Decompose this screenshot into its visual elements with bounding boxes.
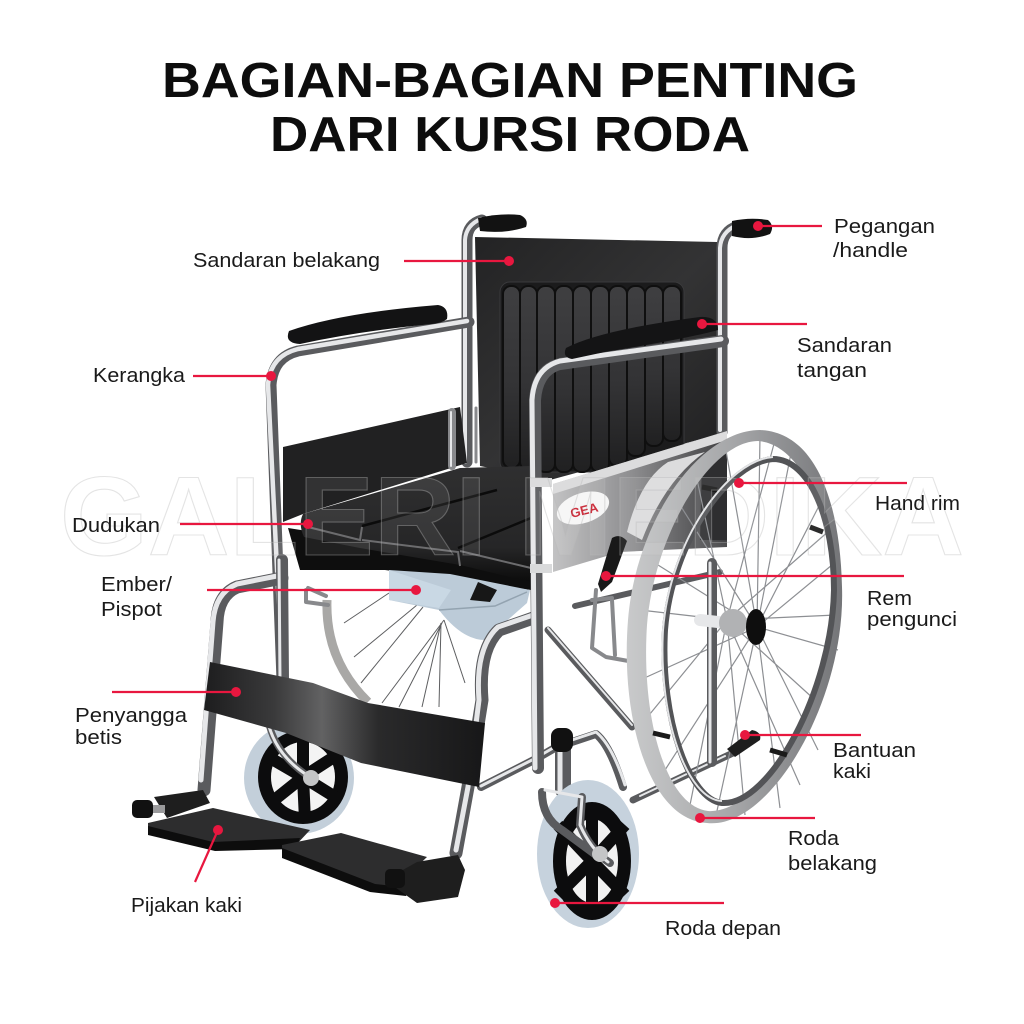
watermark: GALERI MEDIKA [60, 454, 964, 579]
label: Pegangan / handle [753, 216, 935, 262]
label: Bantuan kaki: kaki [833, 761, 871, 783]
title: DARI KURSI RODA [270, 108, 750, 162]
label: Ember / Pispot: Ember/ [101, 574, 172, 596]
label: Penyangga betis: Penyangga [75, 705, 188, 727]
left armrest [288, 305, 447, 344]
label: Dudukan: Dudukan [72, 515, 160, 537]
outer tyre rim [627, 430, 842, 823]
foot-assist tip [727, 730, 760, 757]
left arm frame [268, 321, 469, 680]
label: Roda depan: Roda depan [665, 918, 781, 940]
label: Rem pengunci: pengunci [867, 609, 957, 631]
rear frame post [707, 563, 717, 762]
label: Kerangka: Kerangka [93, 365, 186, 387]
label: Pijakan kaki: Pijakan kaki [131, 895, 242, 917]
label: Rem pengunci: Rem [867, 588, 912, 610]
seat cushion [301, 466, 531, 582]
label: Pijakan kaki [131, 825, 242, 917]
right side panel [553, 431, 727, 572]
label: Ember / Pispot [101, 574, 421, 621]
label: Pegangan / handle: Pegangan [834, 216, 935, 238]
label: Roda belakang [695, 813, 877, 875]
right armrest [565, 317, 718, 359]
right arm frame [530, 339, 723, 768]
title: BAGIAN-BAGIAN PENTING [162, 54, 858, 108]
front caster wheel [537, 728, 639, 928]
label: Hand rim: Hand rim [875, 493, 960, 515]
brake lever and bracket [592, 536, 634, 662]
title [162, 54, 858, 162]
footrests [132, 790, 465, 903]
rim spacers [653, 487, 823, 755]
label: Penyangga betis [75, 687, 241, 749]
left small wheel [244, 718, 354, 834]
lower frame tubes [201, 560, 733, 853]
label: Bantuan kaki: Bantuan [833, 740, 916, 762]
label: Kerangka [93, 365, 276, 387]
label: Bantuan kaki [740, 730, 916, 783]
far rear wheel behind the seat [327, 593, 465, 707]
label: Dudukan [72, 515, 313, 537]
label: Pegangan / handle: /handle [833, 240, 908, 262]
back uprights [465, 219, 738, 462]
wheelchair illustration [132, 214, 842, 928]
label: Sandaran belakang [193, 250, 514, 272]
commode bucket [389, 570, 530, 640]
label: Sandaran tangan: Sandaran [797, 335, 892, 357]
label: Sandaran tangan [697, 319, 892, 382]
label: Roda depan [550, 898, 781, 940]
seat underside frame [288, 528, 531, 605]
handles [478, 214, 772, 238]
label: Sandaran belakang: Sandaran belakang [193, 250, 380, 272]
big rear wheel [627, 430, 842, 823]
seat side panel left [283, 407, 476, 522]
back pad with vertical ribs [500, 282, 684, 472]
label: Sandaran tangan: tangan [797, 360, 867, 382]
label: Roda belakang: Roda [788, 828, 840, 850]
GEA logo: GEA [569, 499, 600, 521]
backrest panel [475, 237, 727, 480]
label: Roda belakang: belakang [788, 853, 877, 875]
label: Hand rim [734, 478, 960, 515]
hub [700, 620, 745, 625]
label: Penyangga betis: betis [75, 727, 122, 749]
label: Rem pengunci [601, 571, 957, 631]
calf strap [204, 662, 485, 787]
label: Ember / Pispot: Pispot [101, 599, 162, 621]
hand rim [664, 459, 834, 803]
GEA logo [553, 485, 613, 531]
